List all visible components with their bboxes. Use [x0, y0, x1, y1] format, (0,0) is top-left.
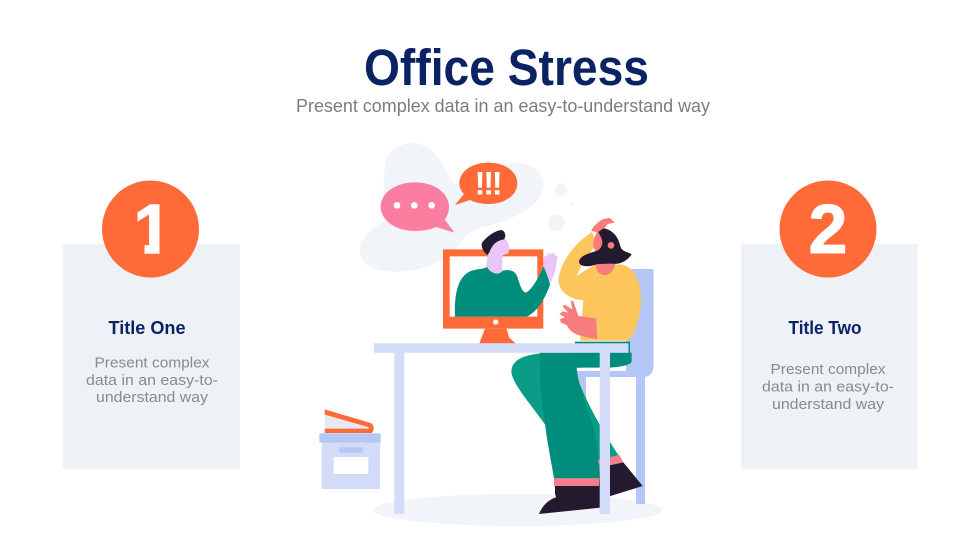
speech bubble: exclamation: !!! — [475, 165, 503, 202]
body text: data in an easy-to- — [86, 372, 218, 389]
card background — [63, 244, 240, 469]
sweater — [558, 232, 641, 341]
thought cloud background — [360, 143, 574, 272]
floor shadow — [373, 494, 662, 526]
desk — [374, 343, 628, 514]
panel: title two — [741, 180, 918, 469]
ear — [608, 242, 614, 249]
head — [489, 238, 509, 257]
folder — [325, 415, 368, 429]
front leg — [540, 353, 632, 478]
lower hand — [559, 301, 597, 339]
box body — [322, 443, 380, 489]
sweater — [455, 267, 550, 317]
box label — [334, 457, 368, 474]
chair — [574, 269, 654, 504]
back shoe — [598, 462, 643, 497]
body text: understand way — [772, 396, 885, 413]
back leg — [577, 375, 618, 467]
woman — [558, 218, 641, 341]
number badge 1 — [102, 180, 199, 278]
neck — [596, 257, 615, 275]
heading: title one: Title One — [108, 318, 186, 338]
heading: title two: Title Two — [788, 318, 862, 338]
number badge 2: 2 — [809, 190, 847, 268]
number badge 2 — [780, 180, 876, 278]
face — [593, 232, 608, 253]
trousers — [511, 342, 643, 514]
thigh and knee — [511, 353, 567, 430]
panel: title one — [63, 180, 240, 469]
speech bubble: dots — [381, 182, 454, 233]
neck — [486, 250, 503, 275]
speech bubble: exclamation — [455, 163, 517, 205]
front sock — [554, 478, 601, 486]
illustration: office scene — [319, 143, 662, 526]
body text: understand way — [96, 389, 209, 406]
body text: Present complex — [770, 361, 886, 378]
box lid — [319, 433, 381, 443]
body text: data in an easy-to- — [762, 378, 894, 396]
body text — [762, 361, 894, 413]
seat area — [573, 342, 630, 368]
storage box with folder — [319, 409, 381, 489]
number badge 1: 1 — [134, 190, 172, 268]
raised hand — [591, 218, 615, 233]
front shoe — [539, 486, 610, 514]
box handle — [339, 447, 363, 453]
back sock — [598, 455, 623, 467]
man on screen — [455, 230, 558, 317]
hair — [579, 228, 632, 266]
monitor — [443, 249, 543, 343]
infographic canvas — [63, 48, 918, 526]
title: Office Stress — [364, 39, 649, 96]
body text: Present complex — [94, 354, 210, 372]
card background — [741, 244, 918, 469]
body text — [86, 354, 218, 406]
hair — [482, 230, 505, 255]
subtitle: Present complex data in an easy-to-understand way — [296, 96, 710, 116]
hand — [543, 253, 558, 285]
